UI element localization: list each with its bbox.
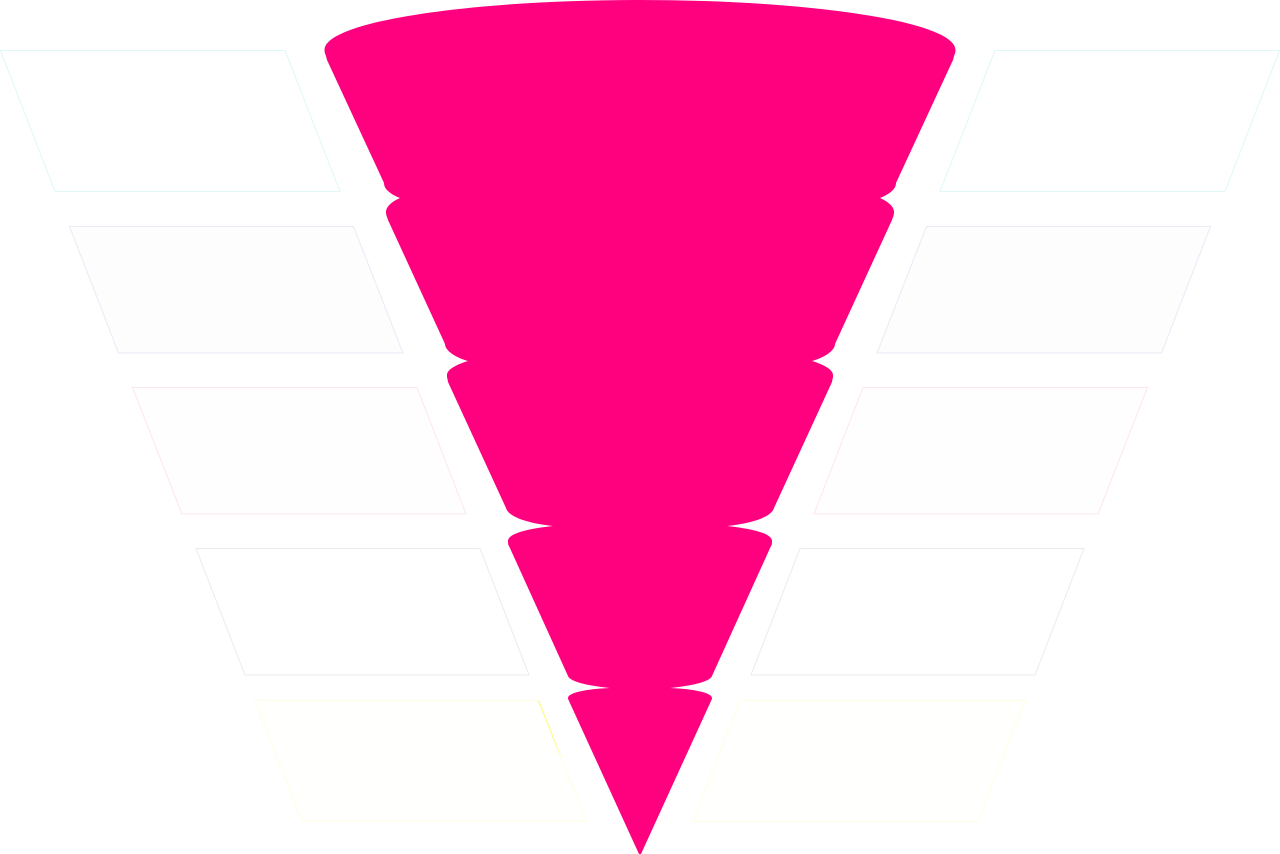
funnel tier 4 — [508, 526, 772, 688]
panel: row 5 right — [693, 700, 1025, 822]
funnel — [324, 0, 956, 854]
panel: row 5 left — [255, 700, 586, 821]
panel: row 4 left — [196, 548, 529, 675]
panel: row 3 right — [814, 388, 1148, 514]
accent: row 5 left edge — [538, 700, 562, 760]
panel: row 3 left — [132, 388, 466, 514]
panel: row 1 left — [0, 50, 340, 192]
funnel tier 5 — [568, 688, 712, 854]
funnel tier 2 — [386, 198, 894, 361]
funnel tier 3 — [447, 361, 833, 526]
panel: row 2 right — [877, 226, 1210, 353]
panel: row 2 left — [70, 226, 403, 353]
funnel tier 1 — [324, 0, 956, 198]
panel: row 4 right — [751, 548, 1084, 675]
panel: row 1 right — [940, 50, 1280, 192]
